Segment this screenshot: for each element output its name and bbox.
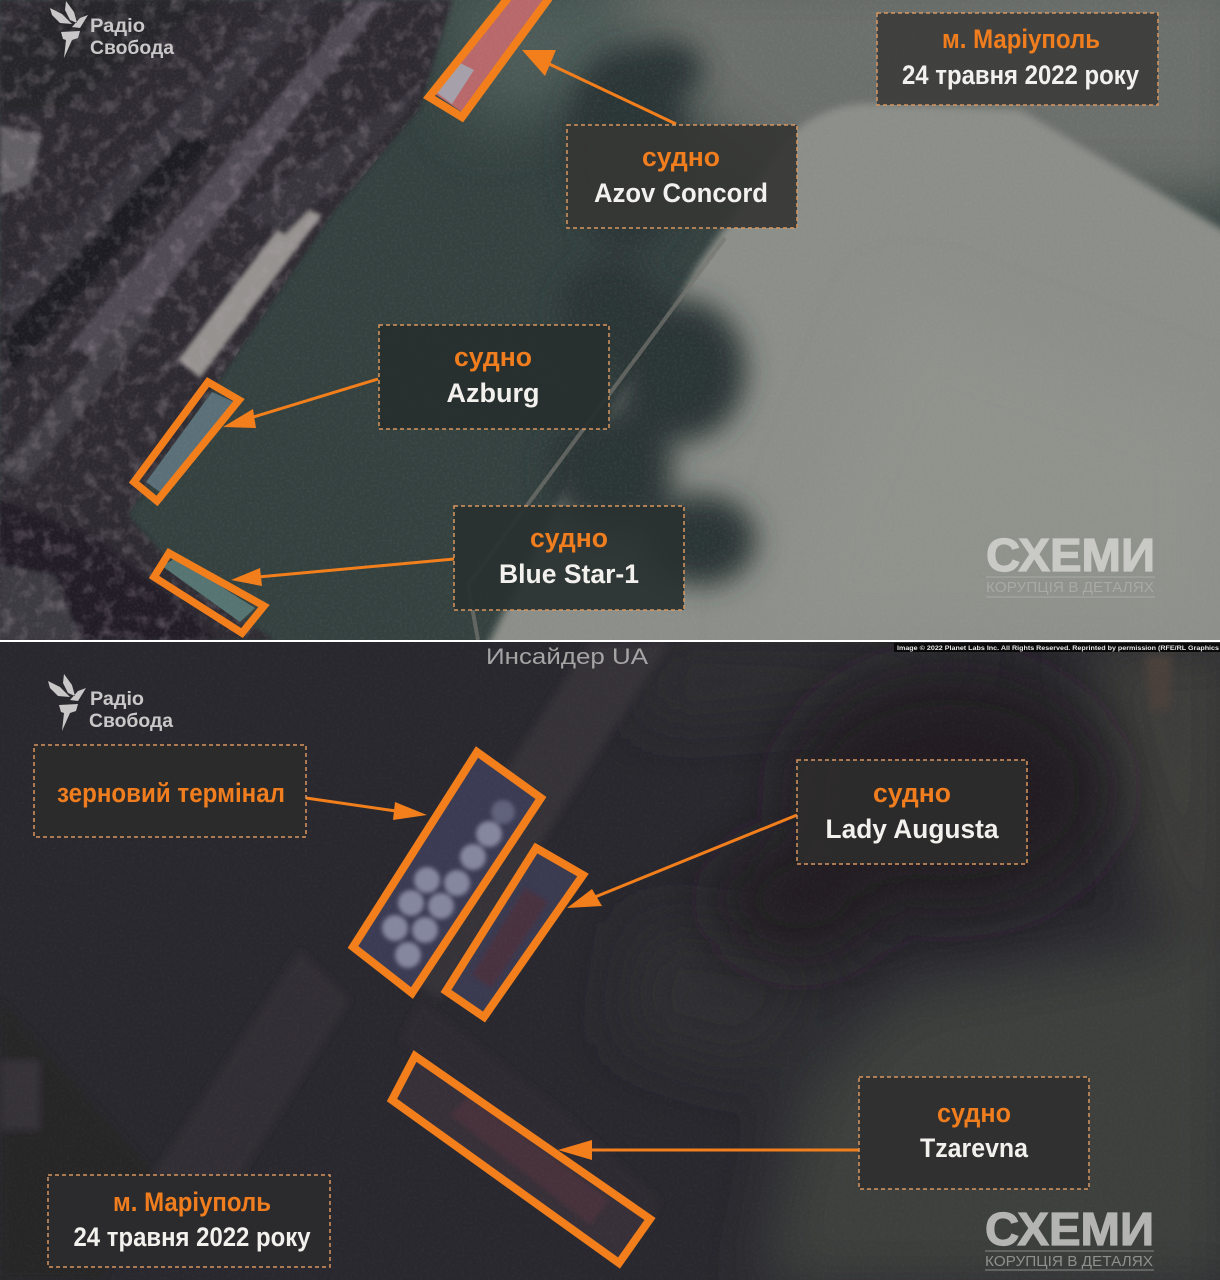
cloud bank, right side — [480, 104, 1220, 660]
arrow: Blue Star-1 — [231, 559, 454, 586]
logo: Schemes bottom: СХЕМИ — [985, 1203, 1154, 1255]
label: date bottom: 24 травня 2022 року — [74, 1222, 310, 1252]
label: date bottom — [48, 1175, 330, 1267]
panel: top satellite image — [0, 0, 1220, 660]
ship: Azov Concord hull — [432, 0, 545, 112]
ship: Lady Augusta hull — [452, 854, 577, 1012]
logo: Radio Svoboda bottom — [48, 674, 173, 732]
label: grain terminal: зерновий термінал — [57, 778, 285, 808]
logo: Radio Svoboda top: Радіо — [90, 16, 145, 37]
panel: bottom satellite image — [0, 642, 1220, 1280]
frame: grain terminal — [353, 752, 541, 993]
arrow: Lady Augusta — [567, 815, 797, 908]
land and quay — [0, 642, 1172, 1280]
logo: Radio Svoboda bottom: Свобода — [89, 711, 173, 732]
dark cloud shadow — [720, 670, 1110, 960]
label: Tzarevna: Tzarevna — [920, 1133, 1029, 1163]
label: Azburg: Azburg — [446, 378, 540, 408]
land and port — [0, 0, 460, 640]
logo: Schemes bottom: КОРУПЦІЯ В ДЕТАЛЯХ — [985, 1253, 1153, 1270]
logo: Radio Svoboda top: Свобода — [90, 38, 174, 59]
arrow: Tzarevna — [558, 1140, 859, 1160]
logo: Schemes top: КОРУПЦІЯ В ДЕТАЛЯХ — [986, 579, 1154, 596]
frame: Azov Concord — [429, 0, 549, 117]
label: date bottom: м. Маріуполь — [113, 1187, 271, 1217]
breakwater — [468, 238, 725, 640]
label: date top: м. Маріуполь — [942, 24, 1100, 54]
lighter water and haze — [760, 642, 1220, 1280]
label: Tzarevna: судно — [937, 1098, 1011, 1128]
label: Azburg — [379, 325, 609, 429]
label: Azburg: судно — [454, 342, 532, 372]
label: Blue Star-1: Blue Star-1 — [499, 559, 639, 589]
label: Blue Star-1: судно — [530, 523, 608, 553]
logo: Radio Svoboda top — [50, 1, 174, 59]
ship: Tzarevna hull — [398, 1062, 644, 1257]
label: Lady Augusta: судно — [873, 778, 951, 808]
label: date top: 24 травня 2022 року — [902, 60, 1139, 90]
image credit strip: Image © 2022 Planet Labs Inc. All Rights Reserved. Reprinted by permission (RFE/RL Graphics — [897, 644, 1219, 652]
ship: Azburg hull — [146, 392, 234, 492]
divider between images — [0, 640, 1220, 642]
frame: Tzarevna — [392, 1056, 650, 1263]
label: Azov Concord: Azov Concord — [594, 178, 768, 208]
label: Tzarevna — [859, 1077, 1089, 1189]
arrow: Azburg — [223, 379, 378, 428]
logo: Schemes top: СХЕМИ — [986, 529, 1155, 581]
sea haze, upper right — [440, 0, 1220, 200]
logo: Radio Svoboda bottom: Радіо — [90, 689, 144, 710]
arrow: grain terminal — [306, 798, 427, 820]
frame: Blue Star-1 — [154, 553, 264, 633]
watermark: Insider UA: Инсайдер UA — [486, 644, 648, 669]
label: Azov Concord: судно — [642, 142, 720, 172]
label: Lady Augusta — [797, 760, 1027, 864]
grain terminal silos — [358, 758, 536, 987]
label: Lady Augusta: Lady Augusta — [826, 814, 999, 844]
label: Blue Star-1 — [454, 506, 684, 610]
arrow: Azov Concord — [522, 50, 676, 124]
frame: Azburg — [134, 382, 239, 501]
highlight frames around objects — [134, 0, 650, 1263]
noise overlay top — [0, 0, 1220, 640]
cloud shadows on water — [546, 42, 756, 586]
label: grain terminal — [34, 745, 306, 837]
frame: Lady Augusta — [446, 848, 583, 1017]
noise overlay bottom — [0, 642, 1220, 1280]
label: Azov Concord — [567, 125, 797, 228]
label: date top — [877, 13, 1158, 105]
ship: Blue Star-1 hull — [162, 558, 255, 622]
